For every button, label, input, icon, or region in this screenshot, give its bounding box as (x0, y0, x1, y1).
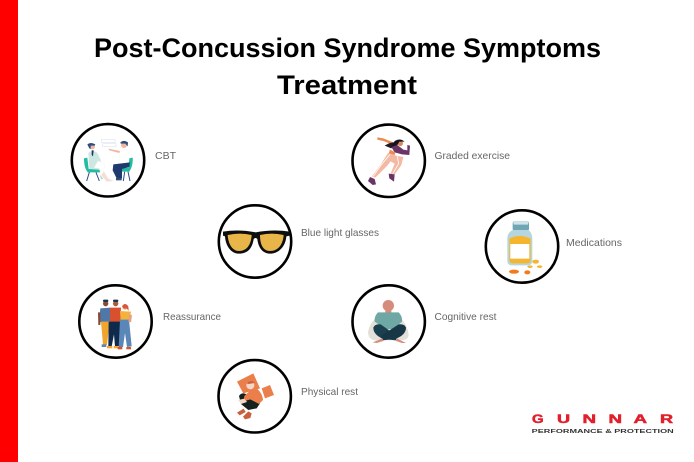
label: CBT (155, 150, 177, 162)
item: medications (486, 210, 622, 283)
logo: GUNNAR: N (608, 413, 622, 426)
logo: GUNNAR (532, 412, 674, 435)
icon: sprinting woman (368, 137, 410, 185)
icon: pill bottle (507, 221, 542, 274)
label: Blue light glasses (301, 227, 379, 239)
item: CBT (72, 124, 177, 196)
label: Reassurance (163, 311, 221, 323)
icon: three friends (98, 300, 132, 349)
item: cognitive rest (352, 285, 497, 358)
item: reassurance (79, 285, 221, 358)
logo: GUNNAR: N (582, 413, 596, 426)
title: Treatment (277, 70, 417, 100)
label: Graded exercise (434, 150, 510, 162)
icon: therapist and patient (84, 139, 133, 182)
item: physical rest (218, 360, 358, 432)
logo: GUNNAR: R (660, 413, 673, 426)
title (94, 33, 601, 100)
item: graded exercise (352, 125, 510, 197)
icon: meditating person (368, 300, 409, 343)
red side bar (0, 0, 18, 462)
icon: glasses (223, 230, 290, 254)
logo: GUNNAR: G (532, 412, 544, 426)
item: blue light glasses (219, 205, 379, 278)
logo: GUNNAR: U (557, 413, 570, 426)
label: Medications (566, 237, 622, 249)
icon: person curled with pillows (237, 373, 274, 419)
label: Physical rest (301, 386, 358, 398)
logo: GUNNAR: A (634, 413, 647, 426)
title: Post-Concussion Syndrome Symptoms (94, 33, 601, 63)
logo: GUNNAR: PERFORMANCE & PROTECTION (532, 429, 674, 435)
label: Cognitive rest (434, 311, 497, 323)
